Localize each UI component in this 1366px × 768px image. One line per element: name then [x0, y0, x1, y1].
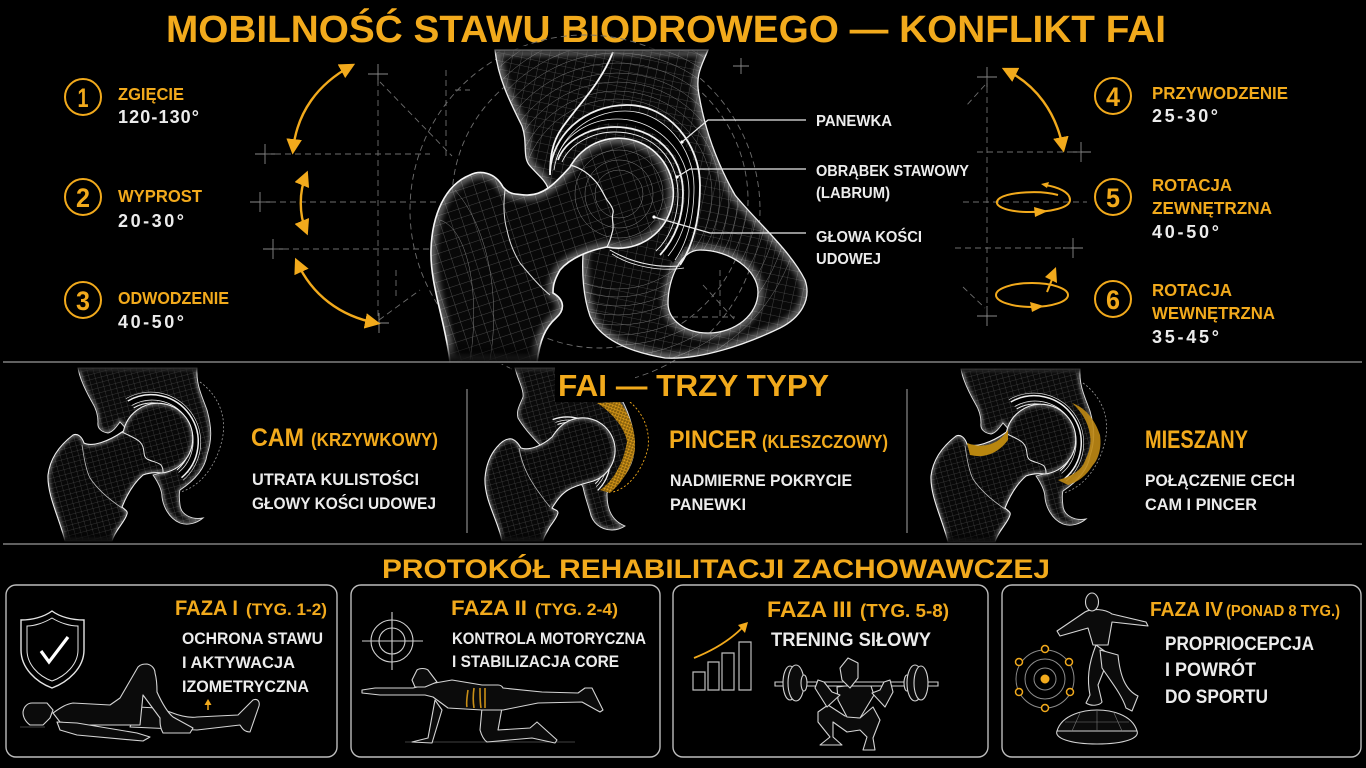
item 2: [65, 179, 202, 231]
figure: bird dog exercise: [362, 668, 603, 743]
phase 4 heading: FAZA IV: [1150, 599, 1224, 621]
pelvis bone: [494, 46, 808, 359]
phase 1 heading: FAZA I: [175, 597, 238, 620]
item 6: [1095, 280, 1275, 347]
range of motion: left column: [65, 79, 229, 332]
PINCER heading: [669, 426, 888, 454]
section heading: FAI — TRZY TYPY: [558, 368, 829, 403]
icon: shield with check: [21, 611, 84, 688]
item 3: 3: [76, 286, 90, 316]
figure: balancing athlete: [1057, 593, 1148, 711]
item 5: [1095, 175, 1272, 242]
figure: barbell squat: [775, 658, 938, 750]
motion arrows left: [293, 66, 376, 323]
figure: lying leg raise: [20, 664, 259, 741]
item 5: 5: [1106, 183, 1120, 213]
item 4: [1095, 78, 1288, 126]
CAM heading: CAM: [251, 424, 304, 452]
PINCER description: PANEWKI: [670, 495, 746, 514]
phase 2 heading: (TYG. 2-4): [535, 600, 618, 619]
CAM heading: (KRZYWKOWY): [311, 430, 438, 450]
mixed description: [1145, 471, 1295, 514]
anatomy labels: GŁOWA KOŚCI: [816, 228, 922, 246]
anatomy labels: OBRĄBEK STAWOWY: [816, 163, 970, 180]
hip joint anatomy diagram: [430, 46, 808, 364]
CAM heading: [251, 424, 438, 452]
item 1: 120-130°: [118, 107, 199, 127]
PINCER description: [670, 471, 852, 514]
icon: proprioception target: [1016, 646, 1074, 712]
item 6: 35-45°: [1152, 327, 1219, 347]
phase 4 text: I POWRÓT: [1165, 659, 1256, 681]
item 2: WYPROST: [118, 186, 202, 206]
phase 1 text: OCHRONA STAWU: [182, 629, 323, 648]
anatomy labels: (LABRUM): [816, 185, 890, 202]
item 3: [65, 282, 229, 332]
mixed heading: MIESZANY: [1145, 426, 1248, 454]
item 6: 6: [1106, 285, 1120, 315]
phase 2 text: KONTROLA MOTORYCZNA: [452, 629, 646, 648]
CAM description: GŁOWY KOŚCI UDOWEJ: [252, 494, 436, 513]
leader lines: [652, 120, 806, 233]
FAI types panel: CAM: [48, 366, 438, 542]
phase 3 card: [673, 585, 988, 757]
item 3: ODWODZENIE: [118, 288, 229, 308]
icon: growth chart: [693, 622, 751, 690]
icon: target: [362, 612, 423, 670]
CAM description: UTRATA KULISTOŚCI: [252, 470, 419, 489]
phase 4 card: [1002, 585, 1361, 757]
phase 2 card: [351, 585, 660, 757]
item 2: 2: [76, 183, 90, 213]
FAI types panel: mixed: [931, 367, 1295, 543]
phase 2 heading: FAZA II: [451, 597, 527, 620]
item 1: 1: [78, 83, 88, 113]
phase 1 heading: [175, 597, 327, 620]
anatomy labels: UDOWEJ: [816, 251, 881, 268]
phase 4 text: PROPRIOCEPCJA: [1165, 634, 1314, 655]
item 5: ROTACJA: [1152, 175, 1232, 195]
anatomy labels: PANEWKA: [816, 113, 892, 130]
phase 3 text: TRENING SIŁOWY: [771, 630, 931, 651]
phase 4 heading: [1150, 599, 1340, 621]
item 3: 40-50°: [118, 312, 184, 332]
range of motion: right column: [1095, 78, 1288, 347]
technical construction lines: [250, 35, 1091, 385]
phase 3 heading: FAZA III: [767, 597, 852, 622]
item 1: ZGIĘCIE: [118, 84, 184, 104]
phase 1 card: [6, 585, 337, 757]
FAI types panel: PINCER: [485, 366, 888, 542]
item 6: ROTACJA: [1152, 280, 1232, 300]
PINCER heading: PINCER: [669, 426, 757, 454]
rehabilitation heading: PROTOKÓŁ REHABILITACJI ZACHOWAWCZEJ: [382, 553, 1050, 584]
item 2: 20-30°: [118, 211, 184, 231]
item 1: [65, 79, 199, 127]
PINCER description: NADMIERNE POKRYCIE: [670, 471, 852, 490]
item 4: 4: [1106, 82, 1120, 112]
phase 3 heading: (TYG. 5-8): [860, 601, 949, 621]
phase 1 heading: (TYG. 1-2): [246, 600, 327, 619]
phase 2 text: I STABILIZACJA CORE: [452, 652, 619, 671]
item 5: ZEWNĘTRZNA: [1152, 198, 1272, 218]
phase 1 text: IZOMETRYCZNA: [182, 677, 309, 696]
PINCER heading: (KLESZCZOWY): [762, 432, 888, 452]
phase 2 heading: [451, 597, 618, 620]
item 4: 25-30°: [1152, 106, 1218, 126]
phase 1 text: I AKTYWACJA: [182, 653, 295, 672]
phase 4 text: [1165, 634, 1314, 708]
title: MOBILNOŚĆ STAWU BIODROWEGO — KONFLIKT FAI: [166, 7, 1166, 51]
motion arrows right: [996, 70, 1070, 312]
bone illustration: CAM: [48, 366, 224, 542]
acetabulum rings: [550, 105, 700, 269]
anatomy labels: [816, 113, 970, 268]
femur bone: [431, 138, 673, 364]
phase 4 text: DO SPORTU: [1165, 687, 1268, 708]
phase 3 heading: [767, 597, 949, 622]
item 4: PRZYWODZENIE: [1152, 83, 1288, 103]
phase 4 heading: (PONAD 8 TYG.): [1226, 603, 1340, 620]
item 6: WEWNĘTRZNA: [1152, 303, 1275, 323]
bone illustration: mixed: [931, 367, 1107, 543]
phase 1 text: [182, 629, 323, 696]
item 5: 40-50°: [1152, 222, 1219, 242]
bone illustration: PINCER: [485, 366, 648, 542]
phase 2 text: [452, 629, 646, 671]
icon: balance dome: [1057, 710, 1137, 744]
mixed description: POŁĄCZENIE CECH: [1145, 471, 1295, 490]
CAM description: [252, 470, 436, 513]
mixed description: CAM I PINCER: [1145, 495, 1257, 514]
